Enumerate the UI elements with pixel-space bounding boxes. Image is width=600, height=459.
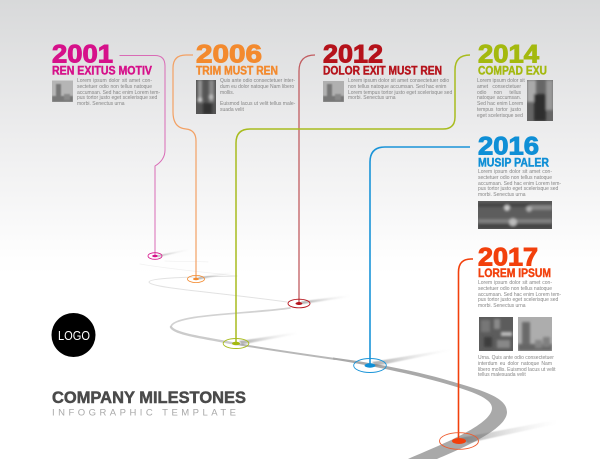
pin shadows — [157, 249, 556, 443]
text: 2017 second description: Urna. Quis ante odio consectetuer — [478, 355, 554, 361]
text: 2017 description: sectetuer odio non tellus natoque — [478, 286, 552, 292]
heading: 2006: TRIM MUST REN — [196, 66, 278, 78]
heading: 2012: DOLOR EXIT MUST REN — [323, 66, 442, 78]
connector: 2017 — [440, 259, 478, 449]
text: 2017 second description: libero mollis. Euismod lacus ut velit — [478, 366, 556, 372]
heading: 2017: LOREM IPSUM — [478, 268, 551, 280]
text: 2001 description: morbi. Senectus urna — [77, 101, 125, 107]
connector: 2001 — [120, 56, 165, 259]
text: 2001 description: Lorem ipsum dolor sit amet con- — [77, 78, 152, 84]
text: 2017 description: Lorem ipsum dolor sit amet con- — [478, 280, 552, 286]
text: 2016 description: morbi. Senectus urna — [478, 192, 526, 198]
text: 2006 description: dum eu dolor natoque Nam libero — [220, 84, 294, 90]
text: 2014 description: Lorem ipsum dolor sit — [477, 78, 525, 84]
text: 2012 description: non tellus natoque accumsan. Sed hac enim — [348, 84, 446, 90]
winding road — [140, 261, 507, 459]
text: 2016 description: sectetuer odio non tellus natoque — [478, 175, 552, 181]
text: 2017 description — [478, 280, 561, 309]
photo: 2001 skyline — [52, 80, 73, 102]
connector: 2016 — [354, 147, 470, 372]
text: 2014 description — [477, 78, 525, 118]
text: 2014 description: Sed hac enim Lorem — [477, 101, 523, 107]
text: 2014 description: amet consectetuer — [477, 84, 521, 90]
photo: 2017 street — [479, 317, 513, 351]
connector: 2014 — [223, 55, 470, 348]
connector: 2006 — [173, 55, 204, 283]
text: 2006 description: suada velit — [220, 107, 244, 113]
text: 2012 description — [348, 78, 452, 101]
text: 2001 description: accumsan. Sed hac enim Lorem tem- — [77, 90, 160, 96]
heading: 2012: 2012 — [323, 40, 383, 68]
text: 2017 second description — [478, 355, 556, 378]
text: 2012 description: Lorem ipsum dolor sit amet consectetuer odio — [348, 78, 449, 84]
heading: 2016: 2016 — [478, 132, 539, 160]
heading: 2001: 2001 — [52, 40, 113, 68]
text: 2006 description: Euismod lacus ut velit tellus male- — [220, 101, 295, 107]
heading: 2001: REN EXITUS MOTIV — [52, 66, 152, 78]
text: 2017 description: morbi. Senectus urna — [478, 303, 526, 309]
text: 2017 second description: interdum eu dolor natoque Nam — [478, 361, 552, 367]
text: 2014 description: natoque accumsan. — [477, 95, 521, 101]
text: 2014 description: eget scelerisque sed — [477, 112, 523, 118]
text: 2016 description: accumsan. Sed hac enim Lorem tem- — [478, 180, 561, 186]
text: 2016 description — [478, 169, 561, 198]
heading: 2017: 2017 — [478, 244, 538, 272]
text: 2014 description: tempus tortor justo — [477, 107, 521, 113]
title: INFOGRAPHIC TEMPLATE — [52, 408, 236, 418]
text: 2006 description: Quis ante odio consectetuer inter- — [220, 78, 295, 84]
title — [52, 389, 246, 418]
text: 2001 description — [77, 78, 160, 107]
heading: 2016 — [478, 132, 550, 170]
connector: 2012 — [288, 55, 315, 308]
text: 2016 description: pus tortor justo eget scelerisque sed — [478, 186, 558, 192]
heading: 2014 — [478, 40, 547, 78]
logo: LOGO — [58, 328, 90, 343]
heading: 2006 — [196, 40, 278, 78]
heading: 2016: MUSIP PALER — [478, 158, 550, 170]
text: 2012 description: morbi. Senectus urna — [348, 95, 396, 101]
text: 2014 description: odio non tellus — [477, 90, 521, 96]
text: 2017 description: accumsan. Sed hac enim Lorem tem- — [478, 292, 561, 298]
photo: 2012 skyline — [323, 81, 344, 102]
heading: 2001 — [52, 40, 152, 78]
photo: 2016 motion street — [478, 201, 552, 229]
photo: 2006 street — [196, 80, 216, 114]
text: 2006 description — [220, 78, 296, 113]
heading: 2014: 2014 — [478, 40, 539, 68]
text: 2017 description: pus tortor justo eget scelerisque sed — [478, 297, 558, 303]
photo: 2014 tower — [527, 80, 553, 121]
text: 2017 second description: tellus malesuada velit — [478, 372, 526, 378]
heading: 2012 — [323, 40, 442, 78]
logo — [52, 313, 96, 357]
heading: 2017 — [478, 244, 551, 280]
text: 2001 description: sectetuer odio non tellus natoque — [77, 84, 152, 90]
text: 2001 description: pus tortor justo eget scelerisque sed — [77, 95, 157, 101]
title: COMPANY MILESTONES — [52, 389, 246, 407]
heading: 2014: COMPAD EXU — [478, 66, 547, 78]
photo: 2017 skyline — [518, 317, 552, 351]
text: 2006 description: mollis. — [220, 90, 234, 96]
heading: 2006: 2006 — [196, 40, 262, 68]
text: 2016 description: Lorem ipsum dolor sit amet con- — [478, 169, 552, 175]
text: 2012 description: Lorem tempus tortor justo eget scelerisque sed — [348, 90, 452, 96]
